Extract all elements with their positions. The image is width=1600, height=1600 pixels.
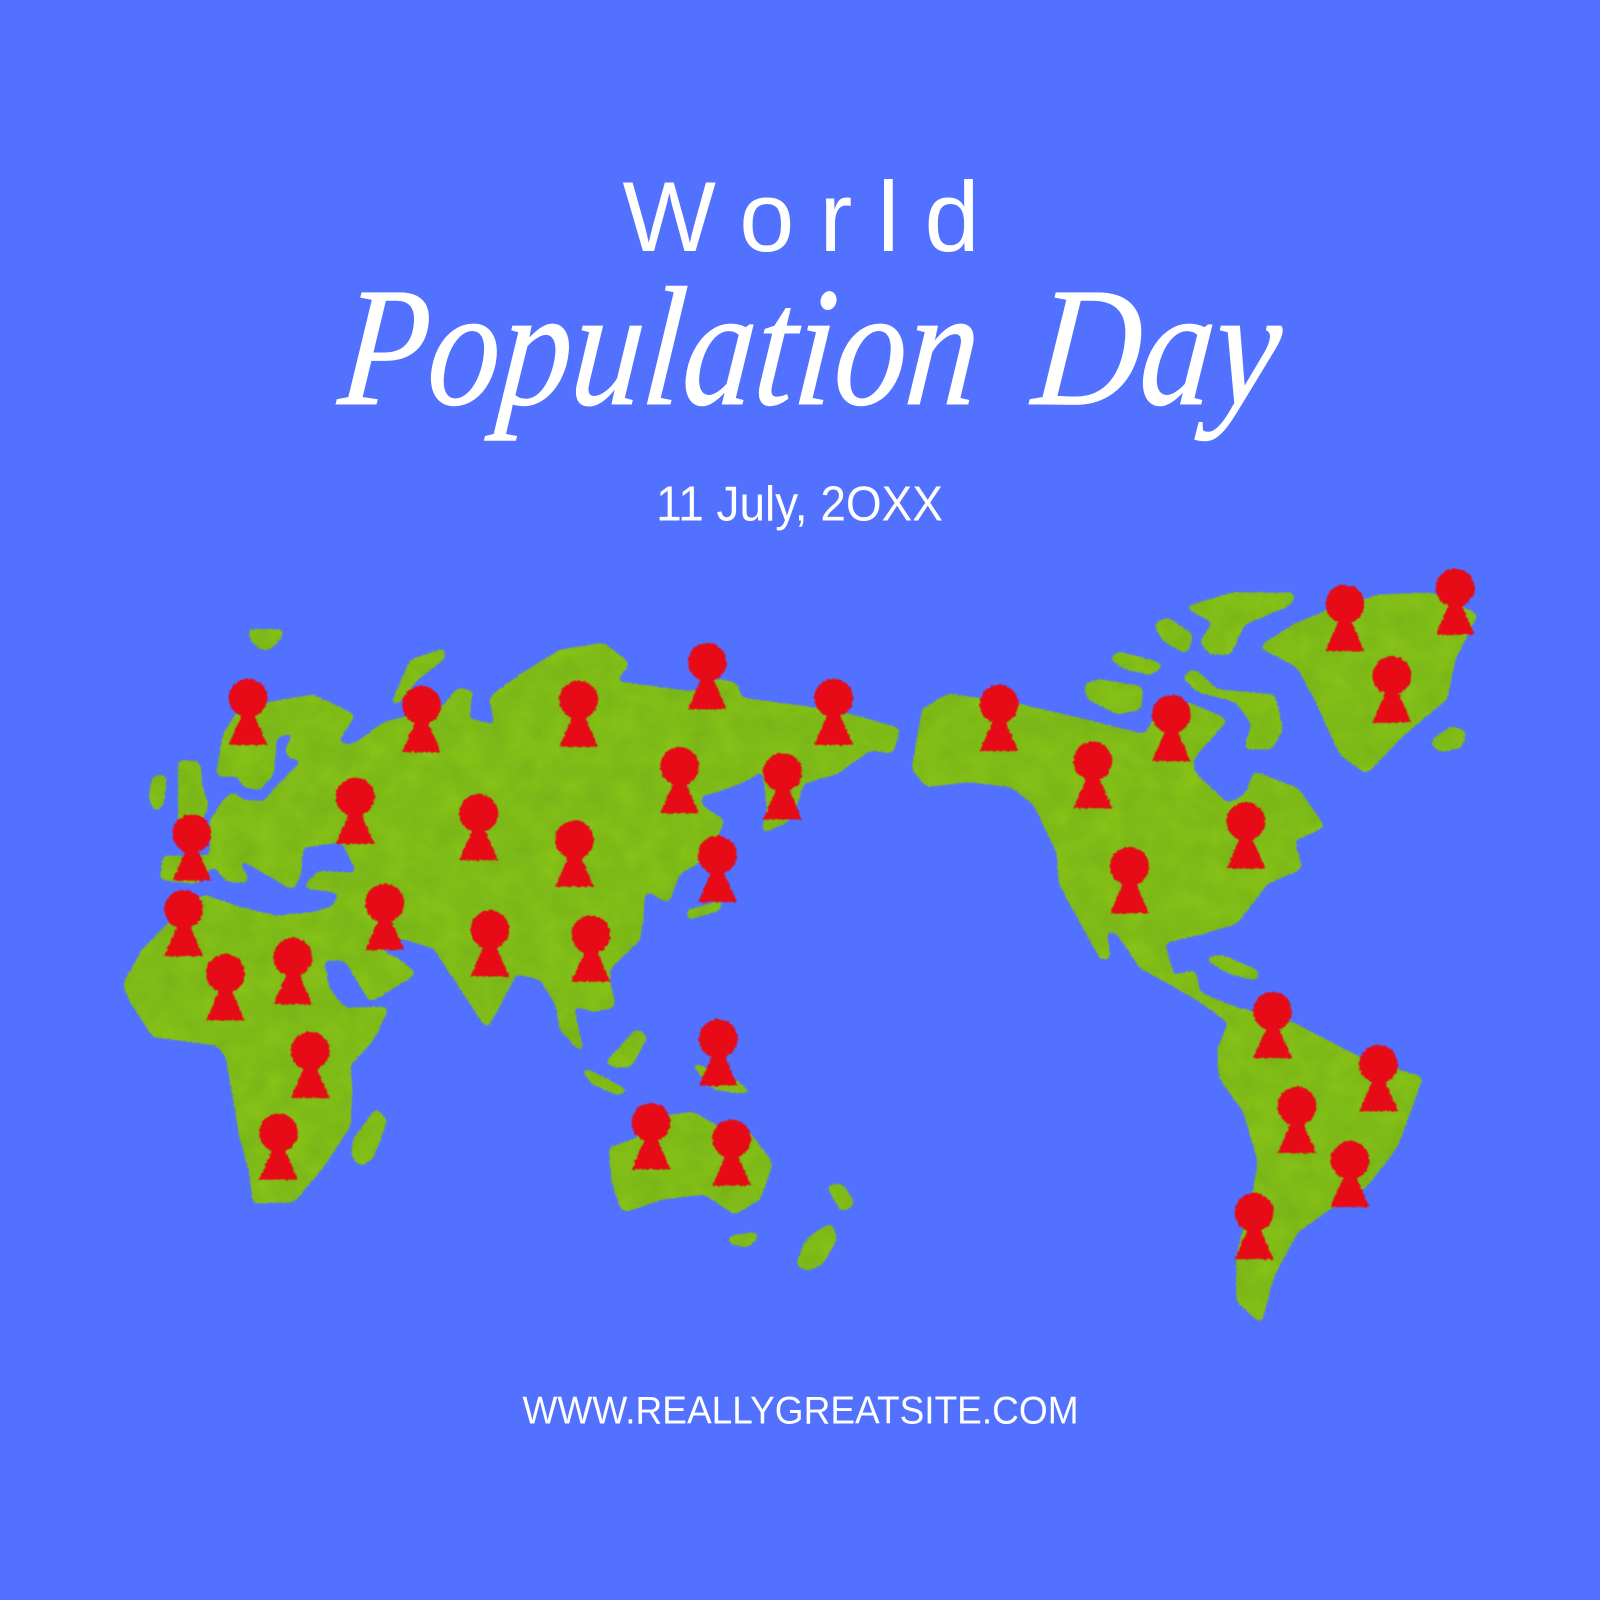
pin bbox=[712, 1119, 751, 1186]
pin bbox=[699, 1019, 738, 1086]
land masses bbox=[123, 593, 1478, 1323]
land: Japan bbox=[685, 900, 723, 919]
pin bbox=[206, 954, 245, 1020]
pin bbox=[632, 1103, 670, 1169]
pin bbox=[980, 685, 1018, 751]
land: New Guinea bbox=[689, 1061, 753, 1094]
land: Arctic island 4 bbox=[1084, 680, 1143, 714]
land: Great Britain bbox=[179, 760, 208, 832]
pin bbox=[559, 681, 598, 747]
land: Baffin Island bbox=[1182, 669, 1283, 749]
pin bbox=[164, 890, 203, 956]
pin bbox=[459, 794, 498, 860]
pin bbox=[1227, 802, 1265, 868]
land: Sumatra and Java bbox=[580, 1066, 630, 1095]
pin bbox=[470, 910, 509, 977]
pin bbox=[1331, 1141, 1369, 1207]
website url: WWW.REALLYGREATSITE.COM bbox=[522, 1389, 1079, 1432]
land: Madagascar bbox=[352, 1108, 387, 1166]
title: Population Day: Population bbox=[332, 252, 988, 441]
pin bbox=[1326, 585, 1364, 651]
pin bbox=[1152, 695, 1191, 761]
land: New Zealand north bbox=[827, 1184, 855, 1212]
land: Arctic island 3 bbox=[1108, 652, 1164, 674]
pin bbox=[660, 747, 699, 813]
land: New Zealand south bbox=[796, 1222, 837, 1270]
land: Greenland bbox=[1259, 593, 1478, 773]
pin bbox=[229, 679, 267, 745]
pin bbox=[763, 753, 802, 819]
title: World: World bbox=[622, 161, 980, 272]
pin bbox=[1372, 656, 1411, 722]
pin bbox=[1235, 1193, 1273, 1259]
land: Iceland bbox=[247, 630, 285, 651]
pin bbox=[814, 679, 853, 745]
land: Arctic island 2 bbox=[1154, 617, 1193, 654]
pin bbox=[336, 778, 374, 844]
pin bbox=[402, 686, 441, 752]
pin bbox=[688, 643, 727, 709]
pin bbox=[259, 1113, 298, 1180]
land: Arctic island 1 bbox=[1185, 593, 1296, 654]
pin bbox=[1073, 742, 1112, 808]
land: Borneo bbox=[605, 1029, 647, 1067]
pin bbox=[273, 938, 312, 1004]
land: Eurasia and Africa bbox=[123, 643, 900, 1203]
pin bbox=[365, 884, 404, 950]
pin bbox=[1436, 568, 1474, 635]
pin bbox=[1278, 1087, 1316, 1153]
land: Tasmania bbox=[727, 1232, 760, 1247]
title: Population Day: Day bbox=[1025, 252, 1290, 441]
pin bbox=[1359, 1045, 1398, 1111]
population pins bbox=[164, 568, 1474, 1259]
date: 11 July, 2OXX bbox=[656, 477, 943, 531]
pin bbox=[555, 820, 594, 887]
land: Americas bbox=[912, 694, 1422, 1323]
land: Ireland bbox=[149, 776, 166, 811]
land: Novaya Zemlya bbox=[392, 648, 445, 705]
pin bbox=[571, 915, 610, 982]
pin bbox=[698, 836, 737, 902]
pin bbox=[291, 1032, 330, 1098]
pin bbox=[172, 814, 211, 881]
land: Cuba bbox=[1204, 955, 1258, 981]
pin bbox=[1253, 992, 1292, 1058]
pin bbox=[1110, 847, 1149, 913]
land: small island east of Greenland bbox=[1430, 727, 1466, 752]
world map bbox=[123, 568, 1478, 1323]
land: Australia bbox=[609, 1112, 772, 1214]
